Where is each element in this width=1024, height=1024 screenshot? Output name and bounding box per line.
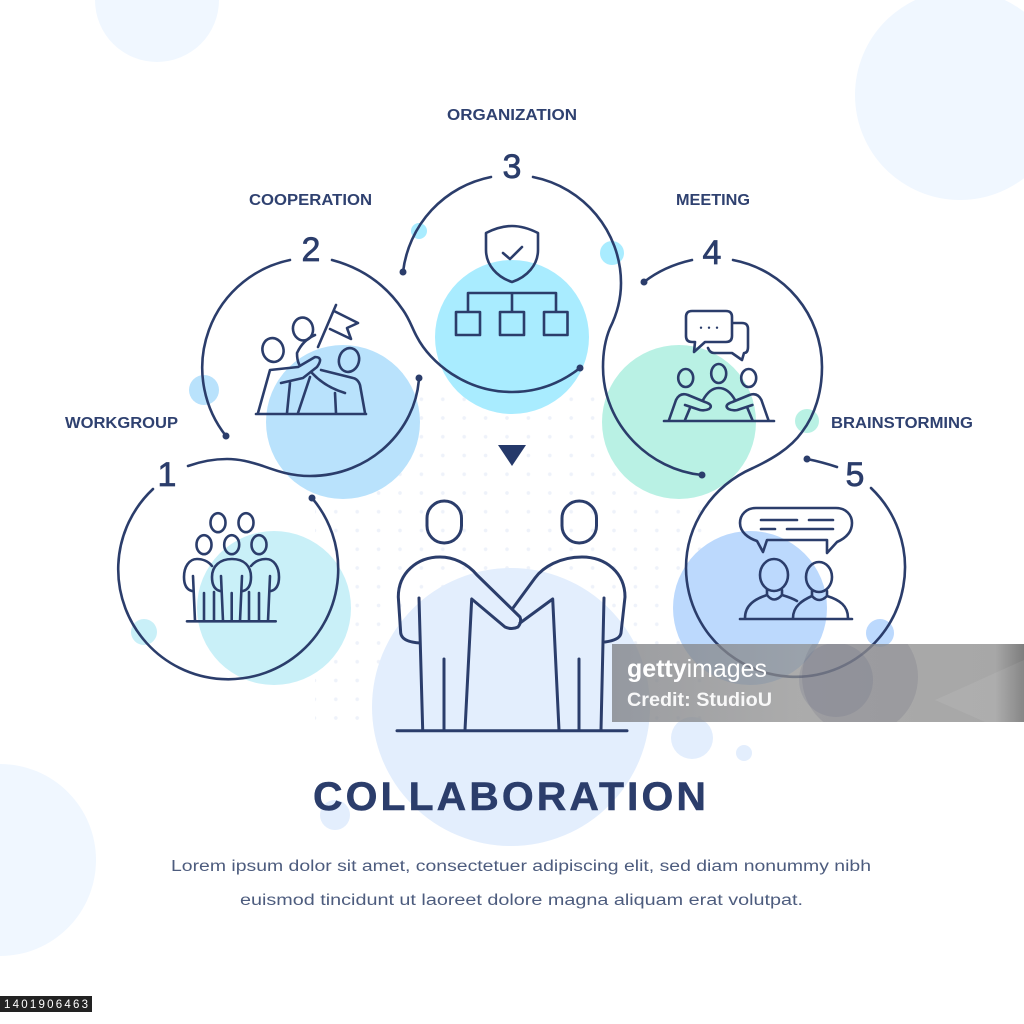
watermark band: Credit: StudioU bbox=[627, 690, 772, 711]
title: COLLABORATION bbox=[313, 775, 709, 819]
watermark band bbox=[612, 644, 1024, 722]
number 1: 1 bbox=[158, 456, 176, 494]
icon: team with flag bbox=[256, 305, 366, 414]
image id tag: 1401906463 bbox=[4, 999, 88, 1011]
step 2: cooperation bbox=[249, 192, 372, 414]
step 3: organization bbox=[447, 107, 577, 335]
icon: meeting with speech bubbles bbox=[664, 311, 774, 421]
number 3: 3 bbox=[503, 148, 521, 186]
label: meeting: MEETING bbox=[676, 192, 750, 209]
body text: euismod tincidunt ut laoreet dolore magna aliquam erat volutpat. bbox=[240, 892, 803, 909]
step 1: workgroup bbox=[65, 415, 279, 621]
icon: shield and org chart bbox=[456, 226, 568, 335]
label: organization: ORGANIZATION bbox=[447, 107, 577, 124]
dot grid behind the central figure bbox=[315, 392, 709, 722]
body text: Lorem ipsum dolor sit amet, consectetuer adipiscing elit, sed diam nonummy nibh bbox=[171, 858, 871, 875]
label: workgroup: WORKGROUP bbox=[65, 415, 178, 432]
step 4: meeting bbox=[664, 192, 774, 421]
coloured circles behind steps bbox=[131, 223, 894, 685]
down arrow bbox=[498, 445, 526, 466]
number 4: 4 bbox=[703, 234, 721, 272]
number 2: 2 bbox=[302, 231, 320, 269]
body text bbox=[171, 858, 871, 909]
watermark band: gettyimages bbox=[627, 655, 767, 683]
number 5: 5 bbox=[846, 456, 864, 494]
icon: two people talking bbox=[740, 508, 852, 619]
label: brainstorming: BRAINSTORMING bbox=[831, 415, 973, 432]
connecting ring line bbox=[118, 177, 905, 679]
label: cooperation: COOPERATION bbox=[249, 192, 372, 209]
step 5: brainstorming bbox=[740, 415, 973, 619]
image id tag bbox=[0, 996, 92, 1012]
central figure: two people shaking hands bbox=[397, 501, 627, 731]
icon: group of people bbox=[184, 513, 279, 621]
